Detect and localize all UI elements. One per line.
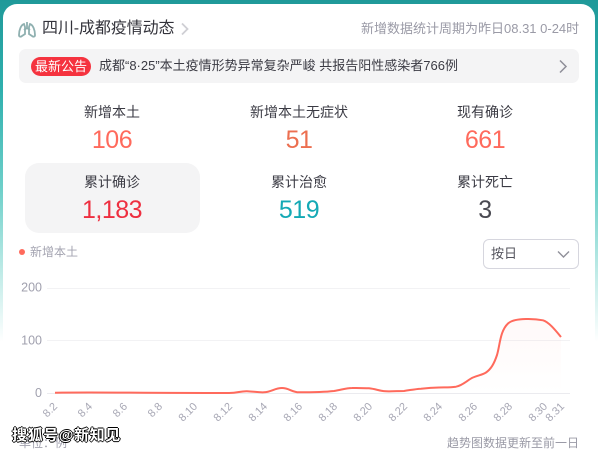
line chart: 8.22: [386, 401, 410, 424]
line chart: 8.28: [491, 401, 515, 424]
line chart: 8.12: [211, 401, 235, 424]
announcement badge: [31, 57, 91, 76]
data period note: 新增数据统计周期为昨日08.31 0-24时: [361, 21, 579, 36]
stat: cumulative cured: 519: [279, 196, 319, 224]
icon: announcement chevron: [560, 60, 567, 73]
trend update note: 趋势图数据更新至前一日: [447, 436, 579, 450]
line chart: 8.2: [41, 401, 60, 420]
stat: cumulative deaths: [457, 174, 513, 224]
announcement bar: [19, 49, 579, 83]
line chart: [21, 280, 570, 424]
stat: cumulative deaths: 3: [478, 196, 492, 224]
stat: cumulative cured: [271, 174, 327, 224]
stat: cumulative confirmed highlighted: 1,183: [82, 196, 142, 224]
line chart: 8.31: [543, 401, 567, 424]
stat: cumulative deaths: 累计死亡: [457, 174, 513, 190]
period dropdown: [483, 239, 579, 269]
line chart: 8.18: [316, 401, 340, 424]
stat: cumulative confirmed highlighted: [25, 163, 200, 233]
announcement text: 成都“8·25”本土疫情形势异常复杂严峻 共报告阳性感染者766例: [99, 58, 458, 73]
icon: lungs: [18, 22, 36, 38]
stat: current confirmed: [457, 104, 513, 154]
line chart: 8.4: [76, 401, 95, 420]
line chart: 8.20: [351, 401, 375, 424]
stat: current confirmed: 现有确诊: [457, 104, 513, 120]
line chart: 8.10: [176, 401, 200, 424]
stat: new asymptomatic: 新增本土无症状: [250, 104, 348, 120]
stat: current confirmed: 661: [465, 126, 505, 154]
stat: new asymptomatic: 51: [286, 126, 312, 154]
period dropdown: 按日: [491, 246, 517, 261]
line chart: 8.24: [421, 401, 445, 424]
line chart: 8.6: [111, 401, 130, 420]
icon: title chevron: [182, 23, 188, 35]
stat: new local: 新增本土: [84, 104, 140, 120]
stat: cumulative confirmed highlighted: 累计确诊: [84, 174, 140, 190]
line chart: 200: [21, 280, 42, 294]
announcement badge: 最新公告: [35, 59, 87, 74]
line chart: 8.8: [146, 401, 165, 420]
line chart: 8.14: [246, 401, 270, 424]
stat: new local: 106: [92, 126, 132, 154]
stat: new asymptomatic: [250, 104, 348, 154]
watermark: 搜狐号@新知见: [12, 427, 121, 444]
line chart: 8.26: [456, 401, 480, 424]
title: 四川-成都疫情动态: [42, 20, 174, 37]
stat: cumulative cured: 累计治愈: [271, 174, 327, 190]
line chart: 8.30: [526, 401, 550, 424]
line chart: 8.16: [281, 401, 305, 424]
stat: new local: [84, 104, 140, 154]
chart legend: 新增本土: [30, 245, 78, 259]
line chart: 0: [35, 386, 42, 400]
unit label: 单位：例: [19, 436, 67, 450]
line chart: 100: [21, 334, 42, 348]
